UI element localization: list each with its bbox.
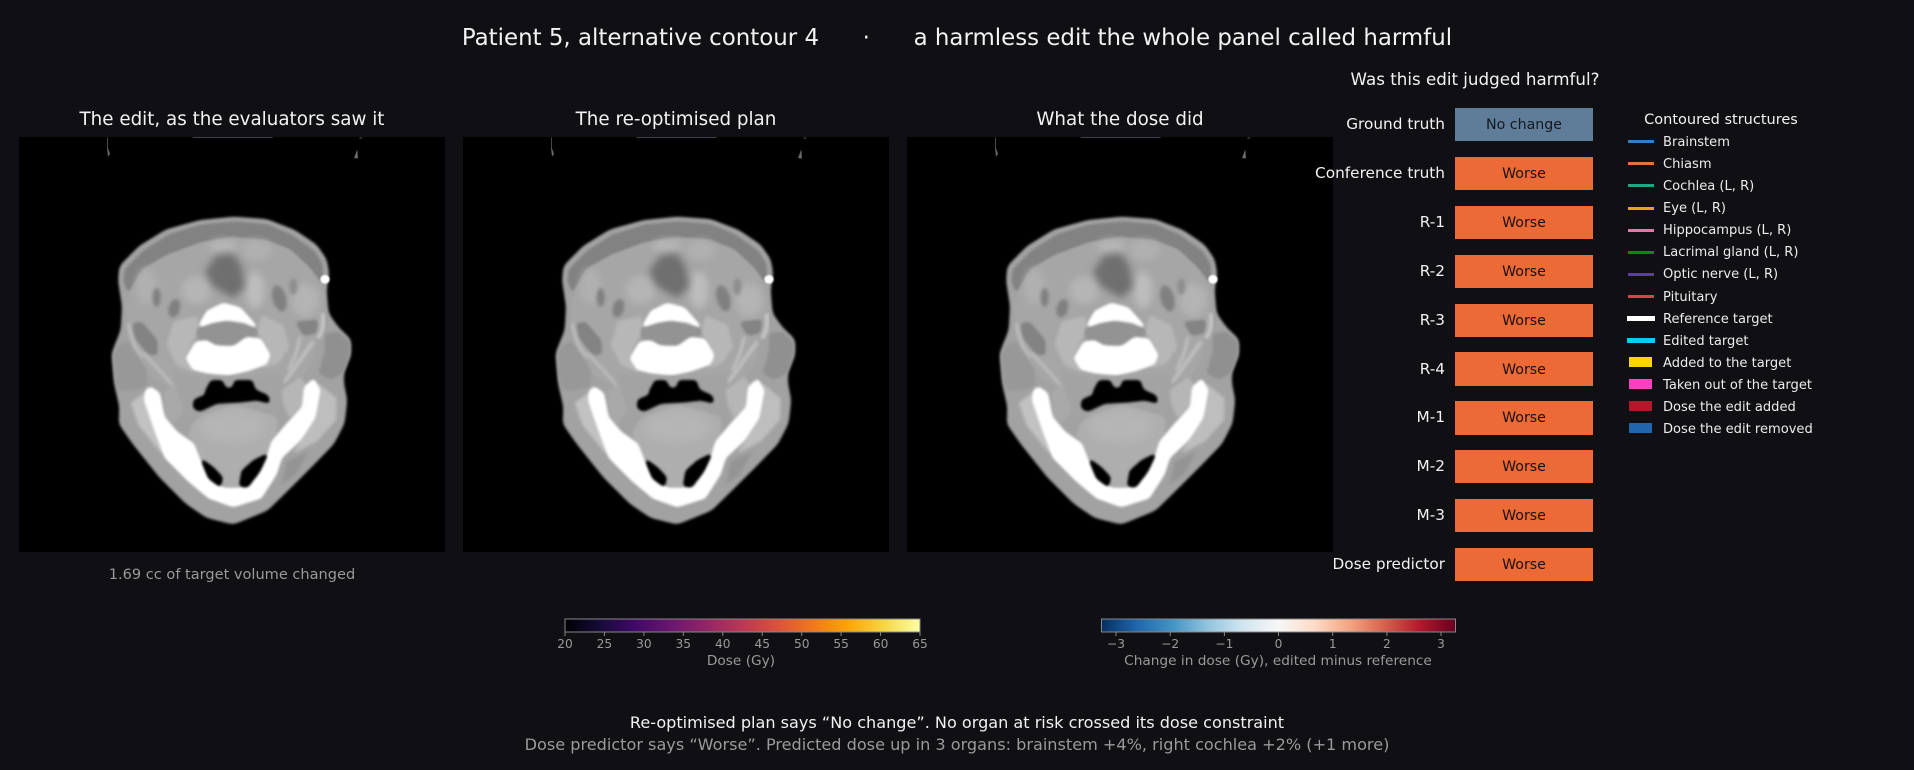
colorbar: dose: 35	[676, 637, 691, 651]
colorbar: change in dose: −1	[1215, 637, 1233, 651]
colorbar: dose: 65	[912, 637, 928, 651]
legend item: lacrimal gland: Lacrimal gland (L, R)	[1663, 245, 1798, 260]
colorbar: dose: 50	[794, 637, 809, 651]
legend item: taken out of target: Taken out of the target	[1662, 378, 1812, 393]
row: M-3: M-3	[1417, 506, 1445, 524]
row: M-2: M-2	[1417, 457, 1445, 475]
legend item: brainstem	[1628, 135, 1730, 150]
row: R-1	[1420, 206, 1593, 239]
summary: re-optimised plan verdict: Re-optimised plan says “No change”. No organ at risk crossed its dose constraint	[630, 713, 1284, 732]
legend item: cochlea: Cochlea (L, R)	[1663, 179, 1754, 194]
title: Patient 5, alternative contour 4 · a harmless edit the whole panel called harmful	[462, 25, 1452, 51]
row: dose predictor: Dose predictor	[1333, 555, 1446, 573]
row: ground truth: No change	[1486, 117, 1562, 133]
legend item: dose added: Dose the edit added	[1663, 400, 1796, 415]
legend: contoured structures	[1627, 112, 1813, 437]
row: R-2: R-2	[1420, 262, 1445, 280]
panel heading: the edit: The edit, as the evaluators saw it	[79, 109, 384, 130]
colorbar: dose: 20	[557, 637, 573, 651]
legend item: added to target: Added to the target	[1663, 356, 1791, 371]
legend item: eye: Eye (L, R)	[1663, 201, 1726, 216]
colorbar: dose: 30	[636, 637, 652, 651]
legend item: dose removed: Dose the edit removed	[1663, 422, 1813, 437]
legend item: pituitary	[1628, 290, 1718, 305]
row: R-2: Worse	[1502, 264, 1546, 280]
row: M-3	[1417, 499, 1593, 532]
legend item: eye	[1628, 201, 1726, 216]
legend item: chiasm: Chiasm	[1663, 157, 1712, 172]
legend item: chiasm	[1628, 157, 1712, 172]
CT image: dose effect	[907, 137, 1333, 552]
summary: dose predictor verdict: Dose predictor says “Worse”. Predicted dose up in 3 organs: brainstem +4%, right cochlea +2% (+1 more)	[525, 735, 1389, 754]
row: R-3: R-3	[1420, 311, 1445, 329]
colorbar: change in dose: 1	[1329, 637, 1337, 651]
colorbar: dose: 60	[873, 637, 888, 651]
row: dose predictor: Worse	[1502, 557, 1546, 573]
colorbar: dose: 45	[754, 637, 770, 651]
colorbar: change in dose: Change in dose (Gy), edited minus reference	[1124, 653, 1432, 669]
colorbar: dose	[557, 619, 928, 669]
colorbar: change in dose: −2	[1161, 637, 1179, 651]
row: M-1: M-1	[1417, 408, 1445, 426]
colorbar: change in dose: −3	[1107, 637, 1125, 651]
legend item: edited target: Edited target	[1663, 334, 1748, 349]
row: ground truth: Ground truth	[1346, 115, 1445, 133]
colorbar: dose: 25	[597, 637, 612, 651]
row: M-3: Worse	[1502, 508, 1546, 524]
colorbar: dose: Dose (Gy)	[707, 653, 775, 669]
CT image: the edit	[19, 137, 445, 552]
row: R-1: Worse	[1502, 215, 1546, 231]
row: dose predictor	[1333, 548, 1593, 581]
panel heading: dose effect: What the dose did	[1036, 109, 1204, 130]
colorbar: change in dose: 2	[1383, 637, 1391, 651]
verdict heading: Was this edit judged harmful?	[1351, 69, 1599, 89]
legend heading: Contoured structures	[1644, 112, 1798, 128]
panel: dose effect	[907, 109, 1333, 552]
legend item: brainstem: Brainstem	[1663, 135, 1730, 150]
panel: the edit	[19, 109, 445, 583]
colorbar: change in dose: 3	[1437, 637, 1445, 651]
colorbar: change in dose: 0	[1275, 637, 1282, 651]
row: M-2	[1417, 450, 1593, 483]
legend item: hippocampus: Hippocampus (L, R)	[1663, 223, 1791, 238]
panel heading: re-optimised plan: The re-optimised plan	[575, 109, 776, 130]
row: conference truth: Conference truth	[1315, 164, 1445, 182]
row: M-1: Worse	[1502, 410, 1546, 426]
legend item: reference target: Reference target	[1663, 312, 1773, 327]
row: M-1	[1417, 401, 1593, 435]
CT image: re-optimised plan	[463, 137, 889, 552]
row: R-4: Worse	[1502, 362, 1546, 378]
row: M-2: Worse	[1502, 459, 1546, 475]
row: R-3: Worse	[1502, 313, 1546, 329]
row: conference truth: Worse	[1502, 166, 1546, 182]
row: R-1: R-1	[1420, 213, 1445, 231]
row: ground truth	[1346, 108, 1593, 141]
colorbar: dose: 40	[715, 637, 731, 651]
panel: re-optimised plan	[463, 109, 889, 552]
row: R-4	[1420, 352, 1593, 386]
legend item: pituitary: Pituitary	[1663, 290, 1718, 305]
row: R-2	[1420, 255, 1593, 288]
row: R-3	[1420, 304, 1593, 337]
legend item: optic nerve: Optic nerve (L, R)	[1663, 267, 1778, 282]
colorbar: dose: 55	[833, 637, 849, 651]
panel: verdict table	[1315, 69, 1599, 581]
colorbar: change in dose	[1102, 619, 1456, 669]
row: conference truth	[1315, 157, 1593, 190]
row: R-4: R-4	[1420, 360, 1445, 378]
caption: volume changed: 1.69 cc of target volume changed	[109, 566, 355, 583]
